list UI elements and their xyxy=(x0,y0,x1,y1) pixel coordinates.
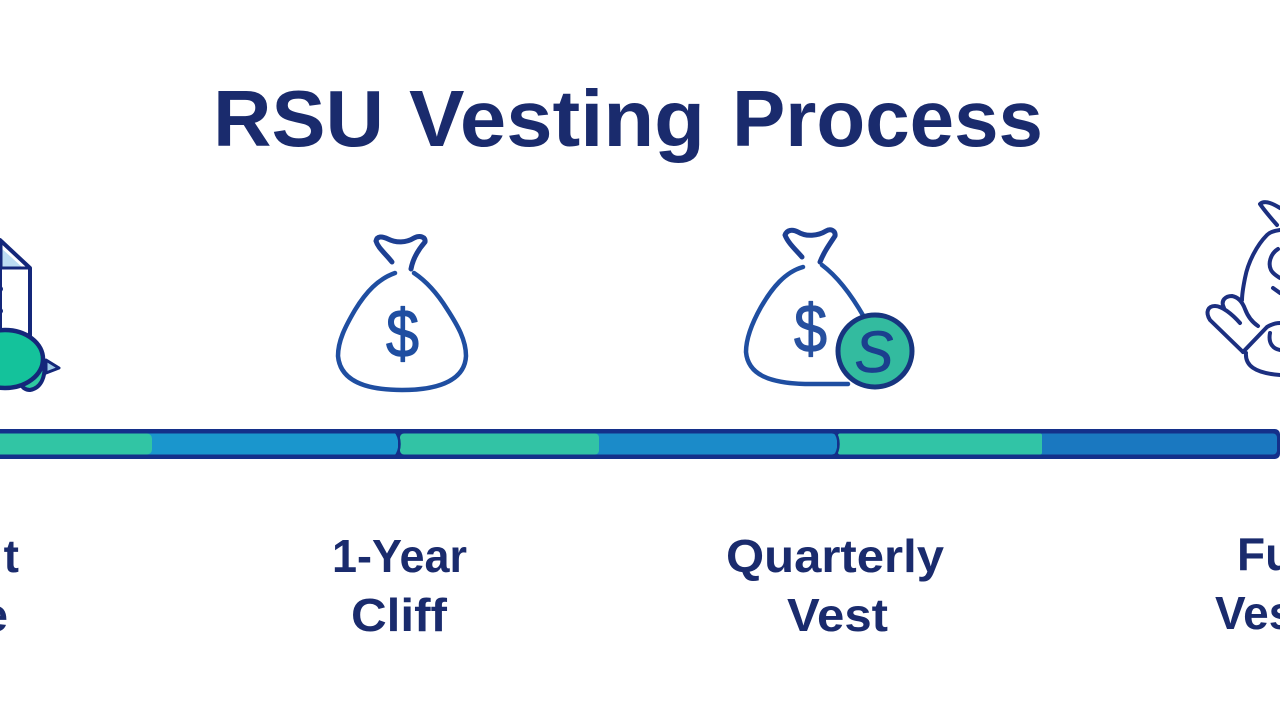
divider marks xyxy=(395,431,838,457)
segment: blue 1 xyxy=(140,434,398,454)
title: Process xyxy=(732,74,1043,163)
icon glyph: coin letter: S xyxy=(855,320,894,385)
title: RSU xyxy=(213,74,384,163)
icon: money bag 1-year cliff xyxy=(338,237,466,390)
icon glyph: bag dollar sign: $ xyxy=(794,291,827,367)
label: quarterly vest: Vest xyxy=(787,589,888,641)
label: grant date (cropped) xyxy=(0,530,19,641)
label: 1-year cliff: 1-Year xyxy=(332,530,467,582)
segment: green 3 xyxy=(838,434,1042,454)
coin xyxy=(838,315,912,387)
label: full vest (cropped) xyxy=(1215,528,1280,639)
icon: money bag in hand xyxy=(1208,202,1280,375)
segment: blue 2 xyxy=(590,434,837,454)
icon: contract document with green seal xyxy=(0,240,59,390)
segment: green 2 xyxy=(400,434,599,454)
label: 1-year cliff: Cliff xyxy=(351,589,448,641)
icon glyph: dollar sign: $ xyxy=(386,296,419,372)
label: 1-year cliff xyxy=(332,530,467,641)
label: quarterly vest xyxy=(726,530,944,641)
progress timeline bar xyxy=(0,429,1280,459)
icon: money bag with coin xyxy=(746,230,912,387)
segment: green 1 xyxy=(0,434,152,454)
title: Vesting xyxy=(409,74,705,163)
label: quarterly vest: Quarterly xyxy=(726,530,944,582)
segment: blue 3 xyxy=(1030,434,1277,454)
title xyxy=(213,74,1043,163)
